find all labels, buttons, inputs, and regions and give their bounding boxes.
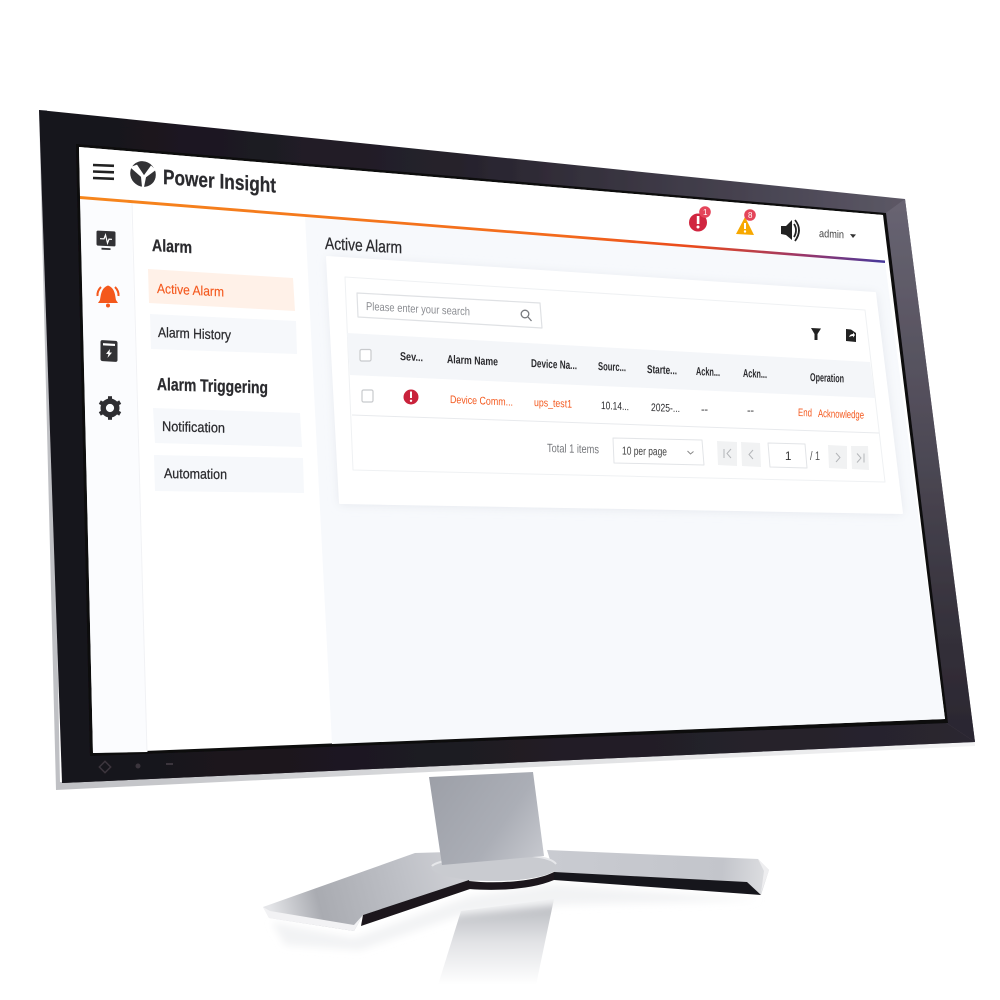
screen inner shadow line	[76, 144, 948, 756]
column: device name: Device Na...	[531, 358, 577, 372]
search box	[357, 293, 542, 328]
search box: Please enter your search	[366, 301, 470, 318]
cell: acknowledged: --	[701, 404, 708, 416]
user menu: admin	[819, 228, 844, 241]
left base arm	[263, 851, 520, 931]
icon: alarm bell	[97, 286, 119, 308]
nav item: Notification: Notification	[162, 418, 225, 436]
table row	[362, 390, 864, 422]
icon: monitor	[96, 231, 116, 250]
alert indicators	[689, 206, 856, 241]
cell: device name: ups_test1	[534, 397, 572, 411]
heading: Alarm Triggering: Alarm Triggering	[157, 374, 268, 397]
total count: Total 1 items	[547, 441, 599, 456]
icon: export	[846, 329, 856, 342]
logo	[130, 160, 156, 188]
table panel	[345, 277, 885, 482]
icon: search	[521, 310, 532, 321]
bezel lower silver edge	[39, 110, 975, 790]
column: severity: Sev...	[400, 351, 423, 364]
heading: Alarm: Alarm	[152, 236, 192, 257]
cell: started: 2025-...	[651, 402, 680, 415]
nav item: Active Alarm: Active Alarm	[157, 281, 224, 300]
action: end: End	[798, 407, 812, 419]
icon: critical alarm: 1	[703, 208, 708, 217]
screen background	[79, 147, 945, 753]
header checkbox	[360, 350, 371, 361]
alarm card	[327, 257, 902, 513]
page size select	[613, 438, 704, 465]
column: alarm name: Alarm Name	[447, 354, 498, 368]
icon: critical alarm	[689, 206, 711, 232]
table header labels	[360, 350, 844, 385]
column: started: Starte...	[647, 364, 677, 377]
button: last page	[851, 446, 869, 470]
icon: warning: 8	[748, 211, 753, 220]
nav item: Automation: Automation	[164, 465, 227, 482]
page total: / 1	[810, 451, 820, 463]
cell: alarm name: Device Comm...	[450, 394, 513, 409]
cell: source: 10.14...	[601, 400, 629, 413]
button: previous page	[741, 442, 761, 467]
main content background	[305, 216, 945, 744]
column: acknowledged: Ackn...	[696, 366, 720, 379]
icon: speaker	[781, 220, 799, 241]
bezel right side	[883, 199, 975, 742]
bezel bottom side	[62, 722, 975, 783]
screen	[79, 147, 945, 753]
icon: warning	[736, 209, 756, 235]
navigation panel	[148, 236, 304, 493]
icon: settings gear	[100, 396, 120, 420]
current page input: 1	[785, 451, 791, 463]
button: first page	[717, 441, 737, 466]
column: operation: Operation	[810, 372, 844, 385]
front panel buttons	[99, 761, 173, 773]
table header band	[347, 333, 875, 398]
nav item: Automation	[154, 455, 304, 493]
icon: menu	[93, 165, 114, 179]
page size select: 10 per page	[622, 446, 667, 458]
bezel frame	[39, 110, 975, 783]
column: source: Sourc...	[598, 361, 626, 374]
base centre disc	[431, 853, 557, 890]
nav item: Active Alarm	[148, 269, 295, 311]
stand neck	[429, 772, 544, 865]
table row divider	[352, 415, 879, 433]
row checkbox	[362, 390, 373, 402]
button: next page	[828, 445, 847, 469]
current page input	[768, 443, 807, 468]
nav item: Alarm History: Alarm History	[158, 324, 231, 343]
icon: filter	[811, 328, 821, 340]
column: acknowledged by: Ackn...	[743, 368, 767, 381]
nav item: Alarm History	[150, 314, 297, 354]
nav item: Notification	[153, 408, 302, 447]
icon rail	[80, 199, 147, 753]
alarm card shadow	[328, 258, 902, 514]
icon: critical severity	[404, 390, 418, 404]
action: acknowledge: Acknowledge	[818, 408, 864, 422]
icon: power panel	[100, 340, 118, 362]
page title: Active Alarm	[325, 234, 402, 257]
stand reflection	[272, 884, 760, 985]
right base arm	[547, 850, 769, 895]
header gradient line	[80, 196, 885, 263]
pagination	[547, 438, 869, 470]
header bar	[79, 147, 885, 262]
monitor stand	[263, 772, 769, 985]
rail divider	[132, 203, 147, 752]
logo text: Power Insight	[163, 166, 276, 197]
cell: acknowledged by: --	[747, 405, 754, 417]
monitor bezel	[39, 110, 975, 790]
